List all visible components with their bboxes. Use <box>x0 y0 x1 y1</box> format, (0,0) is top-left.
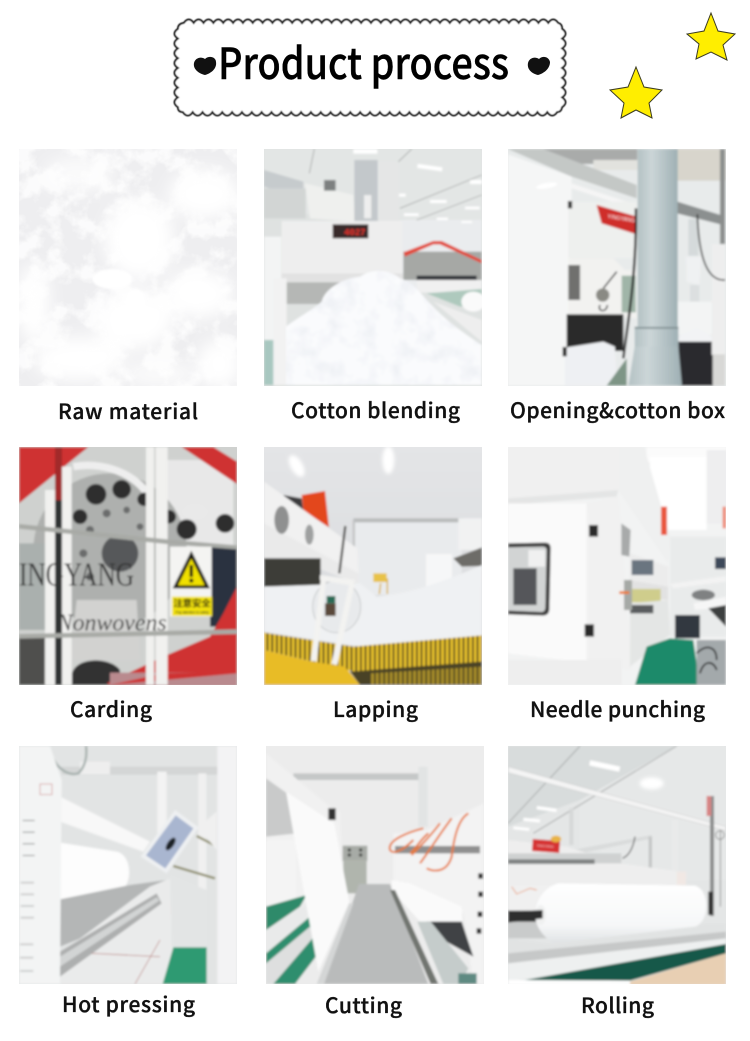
left machine side <box>19 746 62 984</box>
red tag <box>661 507 667 535</box>
label: Hot pressing <box>62 989 195 1019</box>
safety sign: Pay attention to safety <box>176 610 209 614</box>
orange cables <box>390 813 468 871</box>
galvanised column <box>638 149 678 327</box>
diagonal white roll <box>60 797 150 852</box>
safety sign <box>170 547 212 617</box>
panel: carding photo <box>19 447 237 685</box>
machine end wall <box>618 447 670 563</box>
digital scale display: 4027 <box>344 227 366 238</box>
label: Opening&cotton box <box>510 395 725 425</box>
title banner <box>174 19 566 116</box>
fabric roll <box>60 843 129 899</box>
left heart bullet <box>194 57 216 75</box>
background carding machine <box>403 241 485 312</box>
label: Needle punching <box>530 694 705 724</box>
panel: raw material photo <box>19 149 237 386</box>
red brand tag: YINGYANG <box>607 214 635 224</box>
yellow grating <box>264 633 482 672</box>
watermark text: Nonwovens <box>56 611 167 637</box>
label: Lapping <box>333 694 418 724</box>
silver roller <box>60 893 162 977</box>
green floor <box>635 638 700 685</box>
label: Raw material <box>58 396 198 426</box>
panel: lapping photo <box>264 447 482 685</box>
back machine <box>508 840 680 887</box>
right side wall equipment <box>677 202 721 224</box>
conveyor frame <box>264 482 359 573</box>
scalloped frame <box>174 19 566 116</box>
red brand plate <box>532 839 560 853</box>
white frame <box>45 447 168 685</box>
panel: cutting photo <box>266 746 484 984</box>
digital scale display <box>333 224 368 238</box>
red brand plate: YINGYANG <box>537 844 554 849</box>
white web bulge <box>264 565 482 647</box>
icon: star top right <box>687 13 735 60</box>
lower bed <box>508 923 726 970</box>
label: Carding <box>70 694 152 724</box>
white cabinet door <box>508 154 572 386</box>
watermark text: INGYANG <box>19 556 134 593</box>
machine body <box>568 202 637 258</box>
lapping arm <box>311 575 355 665</box>
rear frame <box>62 767 218 775</box>
top rail <box>508 767 726 831</box>
red panels <box>19 447 88 503</box>
cotton heap <box>286 272 482 386</box>
right heart bullet <box>528 57 550 75</box>
observation window <box>508 543 551 616</box>
panel: opening and cotton box photo <box>508 149 726 386</box>
icon: star lower <box>610 67 662 118</box>
perforated conveyor <box>324 884 428 984</box>
hanging white sheet <box>286 792 349 972</box>
panel: needle punching photo <box>508 447 726 685</box>
fabric roll <box>535 883 706 943</box>
control cabinet <box>343 846 367 893</box>
right conveyor <box>670 576 726 588</box>
rails <box>19 524 237 549</box>
gauge pole <box>710 796 714 916</box>
red box <box>302 491 329 527</box>
blue sensor box <box>141 810 199 873</box>
title text: Product process <box>218 30 509 92</box>
lower hinge <box>585 624 594 637</box>
right white pillar <box>217 746 237 984</box>
gauge <box>621 523 631 557</box>
slitter row <box>393 803 484 984</box>
left machinery <box>266 753 342 907</box>
panel: rolling photo <box>508 746 726 984</box>
label: Cutting <box>325 990 402 1020</box>
duct work <box>264 170 303 198</box>
green floor <box>163 947 207 984</box>
safety sign: 注意安全 <box>173 596 211 610</box>
red brand tag <box>597 205 637 234</box>
panel: hot pressing photo <box>19 746 237 984</box>
label: Cotton blending <box>291 395 460 425</box>
label: Rolling <box>581 990 654 1020</box>
panel: cotton blending photo <box>264 149 482 386</box>
hinges <box>589 525 598 537</box>
